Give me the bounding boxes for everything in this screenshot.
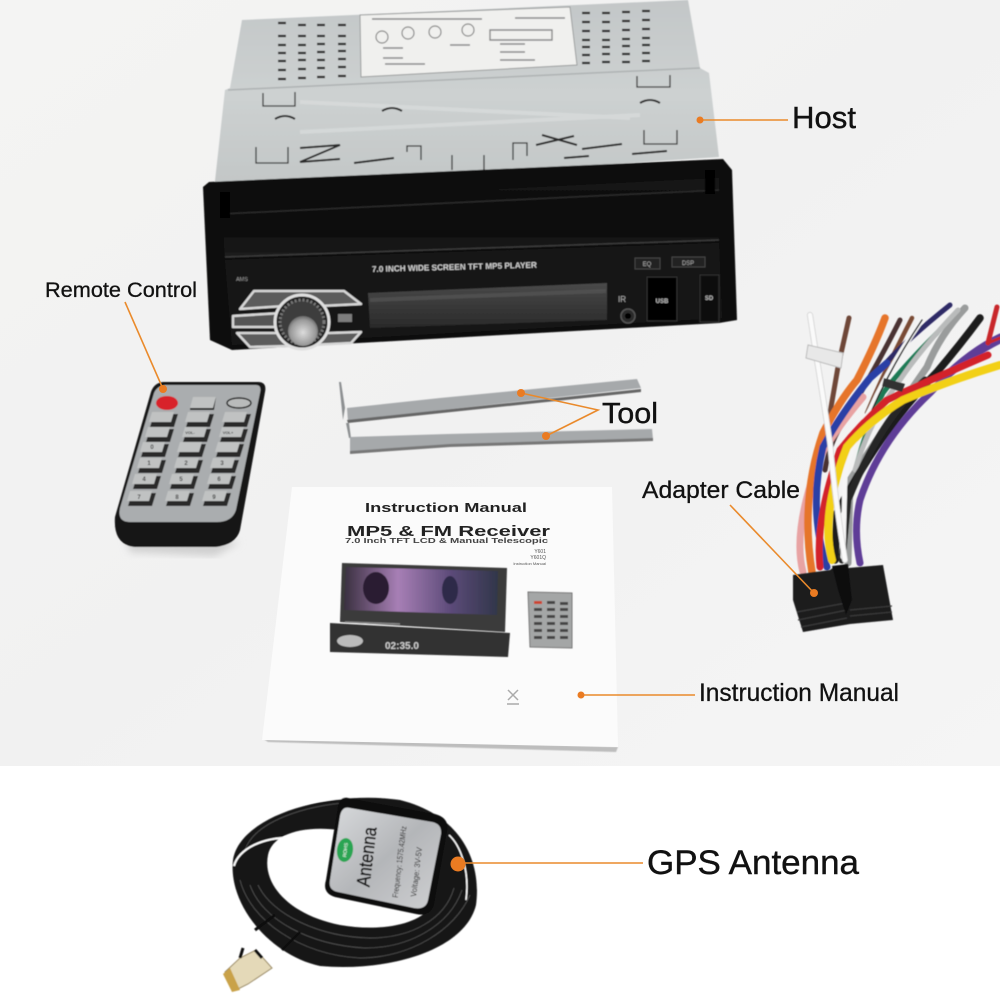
keypad digits: 1 — [147, 461, 151, 467]
photo background panel — [0, 0, 1000, 766]
recycle mark — [507, 690, 519, 704]
DSP button — [672, 257, 705, 267]
mini remote on booklet — [528, 592, 572, 648]
keypad digits: 6 — [217, 477, 221, 483]
remote body — [115, 382, 265, 547]
booklet model numbers — [513, 549, 546, 566]
SD door: SD — [705, 296, 714, 302]
ROHS badge — [335, 837, 355, 863]
instruction manual callout — [578, 679, 899, 707]
keypad digits: 2 — [184, 461, 188, 467]
GPS antenna callout — [450, 844, 860, 882]
IR and aux jack — [618, 295, 635, 323]
spec label — [360, 7, 577, 77]
keypad digits: 0 — [150, 445, 154, 451]
SD door — [700, 275, 719, 322]
remote control callout: Remote Control — [45, 277, 197, 302]
stamped slots — [256, 75, 677, 170]
keypad digits: 9 — [212, 495, 216, 501]
keypad digits: 5 — [179, 477, 183, 483]
keypad digits: 4 — [142, 477, 146, 483]
booklet page — [262, 738, 618, 752]
GPS antenna callout: GPS Antenna — [647, 844, 860, 882]
EQ button: EQ — [643, 262, 652, 268]
frequency label: Frequency: 1575.42MHz — [391, 826, 408, 898]
stereo photo on booklet — [330, 563, 510, 657]
display window — [368, 283, 607, 328]
harness connector — [793, 564, 893, 632]
booklet subtitle: 7.0 Inch TFT LCD & Manual Telescopic — [345, 536, 548, 545]
antenna connector — [223, 948, 272, 992]
host callout: Host — [792, 100, 856, 135]
booklet model numbers: Instruction Manual — [513, 561, 546, 566]
DSP button: DSP — [682, 261, 694, 267]
voltage label: Voltage: 3V-5V — [409, 846, 424, 897]
GPS antenna — [223, 798, 477, 992]
booklet product title: MP5 & FM Receiver — [347, 523, 550, 540]
button faces — [127, 412, 247, 501]
instruction manual callout: Instruction Manual — [699, 679, 899, 707]
adapter cable callout — [642, 477, 818, 597]
white lower panel — [0, 766, 1000, 1000]
EQ button — [635, 258, 660, 269]
keypad digits: 8 — [175, 495, 179, 501]
stereo photo on booklet: 02:35.0 — [385, 641, 419, 652]
keypad digits: VOL+ — [223, 430, 234, 435]
keypad digits: VOL- — [185, 430, 195, 435]
lower tool — [346, 423, 653, 454]
chrome button cluster — [233, 291, 361, 349]
USB door — [647, 277, 677, 321]
volume knob — [275, 295, 329, 349]
IR and aux jack: IR — [618, 295, 626, 304]
remote control callout — [45, 277, 197, 393]
black faceplate — [203, 159, 737, 350]
adapter cable callout: Adapter Cable — [642, 477, 800, 504]
keypad digits — [137, 430, 234, 501]
instruction manual booklet — [262, 487, 618, 752]
remote control — [115, 382, 265, 556]
removal tools — [339, 379, 653, 454]
AMS label: AMS — [236, 277, 248, 283]
booklet heading: Instruction Manual — [365, 500, 527, 515]
tool callout: Tool — [602, 398, 658, 430]
booklet model numbers: Y601 — [534, 549, 546, 555]
wire tags — [806, 345, 905, 392]
remote face — [119, 385, 260, 522]
wires — [800, 305, 1000, 572]
host head unit — [203, 0, 737, 350]
ROHS badge: ROHS — [342, 842, 350, 858]
tool callout — [517, 389, 658, 440]
USB door: USB — [656, 299, 669, 305]
button shadows — [128, 414, 251, 506]
upper tool — [339, 379, 641, 423]
top row buttons — [156, 396, 251, 410]
right vent holes — [582, 11, 650, 63]
antenna puck — [325, 798, 448, 915]
metal chassis — [214, 0, 719, 190]
model caption: 7.0 INCH WIDE SCREEN TFT MP5 PLAYER — [372, 260, 537, 274]
coiled cable — [233, 798, 477, 967]
antenna label: Antenna — [353, 826, 382, 888]
keypad digits: 7 — [137, 495, 141, 501]
keypad digits: 3 — [220, 461, 224, 467]
remote shadow — [125, 535, 240, 556]
adapter cable harness — [800, 305, 1000, 572]
left vent holes — [278, 23, 346, 79]
booklet model numbers: Y601Q — [530, 555, 546, 561]
host callout — [696, 100, 856, 135]
